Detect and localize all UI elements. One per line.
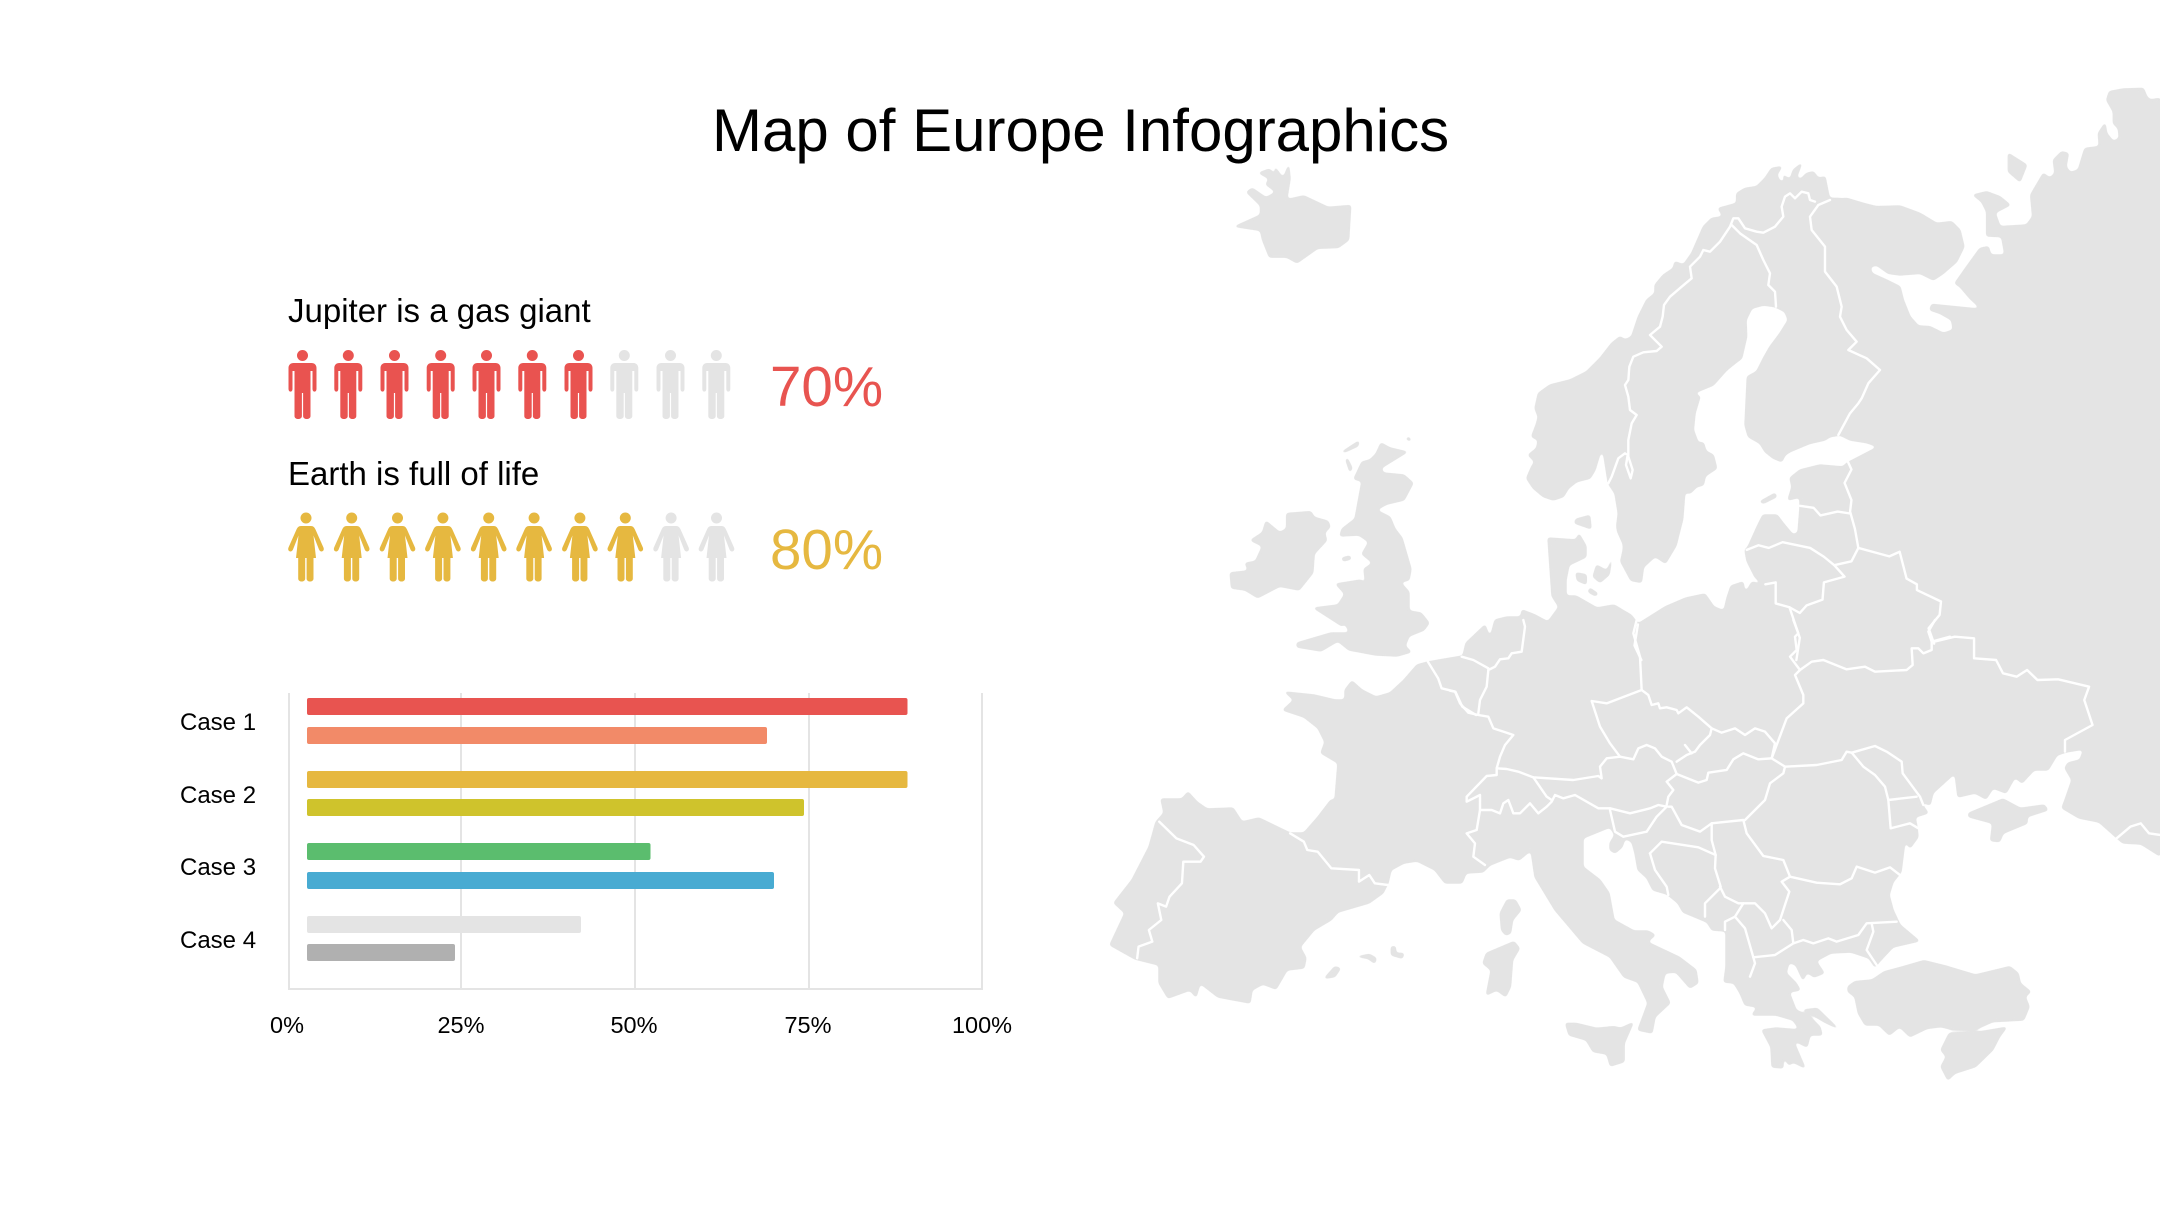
value: 70%: 70% <box>770 355 883 418</box>
bars: Case 2 <box>307 771 908 816</box>
bars: Case 3 <box>307 843 774 889</box>
map borders: central and south-east Europe <box>1450 620 1950 977</box>
map borders: Baltic states <box>1634 462 1941 660</box>
map of Europe <box>1110 88 2160 1080</box>
map land: Russia north <box>1800 88 2160 537</box>
bars: Case 4 <box>307 916 581 961</box>
map borders: Iberia, Belgium and Ukraine-Russia <box>1137 637 2160 958</box>
heading: Earth: Earth is full of life <box>288 455 539 492</box>
axis labels: 25% <box>437 1012 485 1038</box>
axis labels: 100% <box>952 1012 1012 1038</box>
category labels: Case 2 <box>180 782 256 809</box>
heading: Jupiter: Jupiter is a gas giant <box>288 292 591 329</box>
pictogram row: women 80% <box>288 512 734 582</box>
value: 80%: 80% <box>770 518 883 581</box>
map land: mainland Europe <box>1110 440 2160 1068</box>
map land: southern Sweden and Denmark islands <box>1575 443 1710 596</box>
category labels: Case 1 <box>180 709 256 736</box>
category labels: Case 3 <box>180 854 256 881</box>
map land: Ireland and Iceland <box>1230 165 1351 598</box>
map borders: Scandinavia <box>1608 192 1880 483</box>
map land: Mediterranean islands, Crimea and Turkey <box>1325 799 2048 1080</box>
map land: Scandinavia and Finland <box>1527 163 1900 550</box>
bars: Case 1 <box>307 698 908 744</box>
axis labels: 75% <box>784 1012 832 1038</box>
category labels <box>180 709 256 954</box>
axis labels <box>270 1012 1012 1038</box>
map land: Great Britain <box>1297 437 1429 656</box>
bar chart <box>180 693 1012 1038</box>
axis labels: 0% <box>270 1012 304 1038</box>
axis labels: 50% <box>610 1012 658 1038</box>
category labels: Case 4 <box>180 927 256 954</box>
pictogram row: men 70% <box>288 350 730 419</box>
title: Map of Europe Infographics <box>712 97 1449 164</box>
